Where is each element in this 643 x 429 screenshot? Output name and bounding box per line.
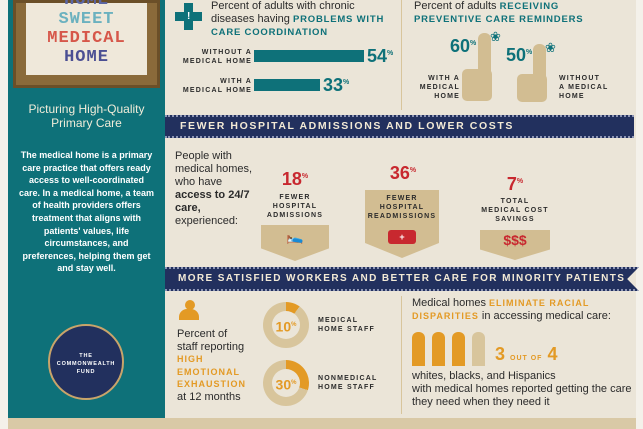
panel: preventive reminders: [414, 0, 608, 102]
stat: admissions: HOSPITAL: [273, 203, 317, 210]
panel: preventive reminders: MEDICAL: [420, 84, 460, 91]
stat: admissions: FEWER: [279, 194, 311, 201]
sidebar: [8, 0, 165, 418]
stat: admissions: 18%: [282, 169, 308, 189]
hand 1: [462, 29, 501, 101]
hand 1: ❀: [490, 29, 501, 44]
hand 2: [517, 40, 556, 102]
text: HIGH: [177, 354, 204, 364]
stat: admissions: [261, 169, 329, 261]
banner: satisfied workers: MORE SATISFIED WORKERS AND BETTER CARE FOR MINORITY PATIENTS: [178, 273, 625, 284]
text: EMOTIONAL: [177, 366, 240, 376]
stat: readmissions: [365, 163, 439, 258]
sidebar heading: [28, 102, 145, 130]
framed picture: home sweet medical home: HOME: [64, 48, 109, 67]
logo: the commonwealth fund: FUND: [77, 369, 95, 375]
bar: without: [183, 49, 252, 65]
logo: the commonwealth fund: COMMONWEALTH: [57, 361, 115, 367]
banner: fewer hospital admissions: FEWER HOSPITAL ADMISSIONS AND LOWER COSTS: [180, 120, 514, 132]
logo: the commonwealth fund: [48, 324, 124, 400]
text: with medical homes reported getting the care they need when they need it: [412, 383, 632, 408]
icon: medical cross: [175, 3, 202, 30]
panel: care coordination: [175, 0, 394, 95]
stat: savings: MEDICAL COST: [481, 207, 549, 214]
panel: preventive reminders: 60%: [450, 36, 476, 56]
logo: the commonwealth fund: THE: [79, 353, 93, 359]
sidebar heading: Primary Care: [51, 116, 122, 130]
bar: with: MEDICAL HOME: [183, 87, 252, 94]
stat: savings: $$$: [503, 232, 527, 248]
text: whites, blacks, and Hispanics: [412, 370, 556, 382]
stat: readmissions: READMISSIONS: [368, 213, 436, 220]
panel: racial disparities: [412, 297, 632, 408]
framed picture: home sweet medical home: MEDICAL: [47, 29, 126, 48]
text: [177, 328, 246, 402]
panel: emotional exhaustion: NONMEDICAL: [318, 375, 377, 382]
stat: 3 OUT OF 4: [495, 344, 557, 364]
donut 30%: [263, 360, 309, 406]
stat: readmissions: 36%: [390, 163, 416, 183]
divider: [401, 296, 402, 414]
icon: person: [179, 300, 199, 320]
divider: [401, 0, 402, 110]
banner: satisfied workers: [165, 267, 639, 291]
panel: emotional exhaustion: [177, 300, 377, 406]
bar: without: WITHOUT A: [202, 49, 252, 56]
bar: with: [183, 78, 252, 94]
banner: fewer hospital admissions: [165, 115, 634, 138]
heading: Percent of adults RECEIVING PREVENTIVE CARE REMINDERS: [414, 0, 583, 25]
icon: people 3 of 4: [412, 332, 485, 366]
bottom strip: [8, 418, 636, 429]
panel: care coordination: 54%: [367, 46, 393, 66]
panel: emotional exhaustion: MEDICAL: [318, 317, 358, 324]
framed picture: home sweet medical home: SWEET: [58, 10, 114, 29]
stat: readmissions: FEWER: [386, 195, 418, 202]
stat: admissions: ADMISSIONS: [267, 212, 323, 219]
stat: admissions: 🛌: [286, 228, 304, 244]
main background panel: [160, 0, 636, 418]
panel: emotional exhaustion: HOME STAFF: [318, 326, 375, 333]
icon: medical cross: !: [187, 11, 190, 22]
panel: care coordination: 33%: [323, 75, 349, 95]
text: Percent of staff reporting: [177, 328, 244, 352]
framed picture: home sweet medical home: [13, 0, 160, 88]
text: [412, 370, 632, 408]
stat: savings: [480, 174, 550, 260]
donut 10%: [263, 302, 309, 348]
panel: preventive reminders: HOME: [559, 93, 585, 100]
stat: savings: 7%: [507, 174, 523, 194]
text: at 12 months: [177, 390, 241, 402]
stat: savings: SAVINGS: [495, 216, 535, 223]
heading text: Percent of adults with chronic diseases having PROBLEMS WITH CARE COORDINATION: [211, 0, 384, 38]
panel: preventive reminders: WITHOUT: [559, 75, 600, 82]
intro text: People with medical homes, who have access to 24/7 care, experienced:: [175, 150, 252, 227]
stat: readmissions: +: [399, 232, 405, 242]
bar: with: WITH A: [220, 78, 252, 85]
donut 30%: 30%: [276, 377, 296, 393]
stat: savings: TOTAL: [501, 198, 529, 205]
donut 10%: 10%: [276, 319, 296, 335]
heading: Medical homes ELIMINATE RACIAL DISPARITIES in accessing medical care:: [412, 297, 611, 322]
sidebar description: The medical home is a primary care practice that offers ready access to well-coordinated care. In a medical home, a team of health providers offers treatment that aligns with patients' values, life circumstances, and preferences, helping them get and stay well.: [19, 150, 154, 273]
panel: preventive reminders: WITH A: [428, 75, 460, 82]
panel: hospital admissions: [175, 150, 550, 261]
panel: preventive reminders: 50%: [506, 45, 532, 65]
panel: preventive reminders: HOME: [434, 93, 460, 100]
panel: preventive reminders: A MEDICAL: [559, 84, 608, 91]
stat: readmissions: HOSPITAL: [380, 204, 424, 211]
sidebar heading: Picturing High-Quality: [28, 102, 145, 116]
hand 2: ❀: [545, 40, 556, 55]
panel: emotional exhaustion: HOME STAFF: [318, 384, 375, 391]
bar: without: MEDICAL HOME: [183, 58, 252, 65]
text: EXHAUSTION: [177, 379, 246, 389]
